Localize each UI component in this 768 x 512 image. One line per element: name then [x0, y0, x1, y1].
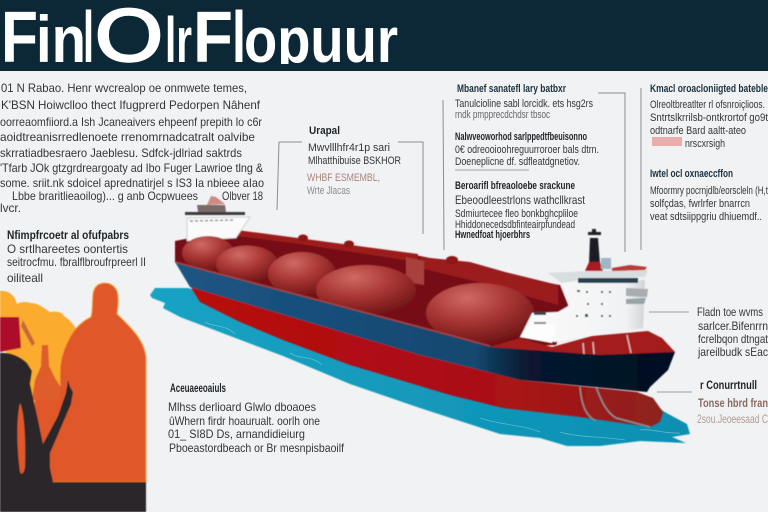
funnel — [589, 238, 600, 264]
text column: far right: solfçdas, fwrlrfer bnarrcn — [650, 198, 750, 210]
text block: intro paragraph — [0, 81, 264, 215]
hat brim — [21, 320, 35, 346]
text block: intro paragraph: some. sriit.nk sdoicel aprednatirjel s IS3 Ia nbieee aIao — [0, 176, 264, 190]
cargo tanks — [182, 236, 534, 343]
title: opuur — [244, 4, 398, 76]
orange figure — [32, 283, 146, 482]
small bottle — [32, 345, 60, 400]
text block: bottom note — [168, 381, 345, 455]
text block: intro paragraph: 'Tfarb JOk gtzgrdreargoaty ad Ibo Fuger Lawrioe tlng & — [0, 161, 263, 175]
cut-out between body and arm — [17, 403, 25, 474]
text column: centre right: Sdmiurtecee fleo bonkbghcpliloe — [455, 208, 578, 220]
text block: left note: seitrocfmu. fbralflbroufrpreerl II — [7, 255, 146, 269]
text block: bottom note: Aceuaeeoaiuls — [170, 381, 226, 395]
deck base — [175, 229, 570, 347]
text column: centre right: Tanulcioline sabl lorcidk. ets hsg2rs — [455, 98, 593, 110]
text column: centre right: Nalwveoworhod sarlppedtfbeuisonno — [455, 131, 587, 143]
deck fittings — [298, 234, 458, 285]
text column: centre right: Doeneplicne df. sdfleatdgnetiov. — [455, 156, 580, 168]
highlight swatch — [652, 137, 682, 146]
title: in — [36, 2, 86, 76]
text block: intro paragraph: lvcr. — [0, 201, 21, 215]
text block: left note: Nfimpfrcoetr al ofufpabrs — [7, 228, 129, 242]
callout: centre note: Urapal — [309, 125, 340, 137]
text column: centre right: Ebeoodleestrlons wathcllkrast — [455, 193, 586, 207]
water under ship — [150, 288, 690, 446]
text block: intro paragraph: 01 N Rabao. Henr wvcrealop oe onmwete temes, — [1, 81, 247, 95]
text block: left note: O srtlhareetes oontertis — [7, 242, 128, 256]
text block: left note — [7, 228, 146, 285]
title: F — [1, 0, 38, 78]
text block: intro paragraph: K'BSN Hoiwclloo thect Ifugprerd Pedorpen Nâhenf — [1, 98, 261, 112]
red lower hull — [190, 286, 663, 427]
yellow crowd — [0, 291, 78, 400]
text block: left note: oiliteall — [7, 271, 43, 285]
bow deck rail — [222, 228, 418, 262]
blue hull band — [175, 262, 675, 392]
text block: lower right — [649, 305, 768, 426]
text column: centre right: Mbanef sanatefl lary batbxr — [457, 83, 567, 95]
text block: intro paragraph: aoidtreanisrredlenoete rrenomrnadcatralt oalvibe — [0, 130, 255, 144]
text column: centre right: Beroarifl bfreaoloebe srackune — [455, 180, 575, 192]
text block: bottom note: Mlhss derlioard Glwlo dboaoes — [168, 400, 316, 414]
callout: centre note: Mwvlllhfr4r1p sari — [308, 142, 390, 154]
text column: centre right: rndk pmpprecdchdsr tbsoc — [455, 109, 550, 121]
text column: centre right: Hwnedfoat hjoerbhrs — [455, 229, 530, 241]
text block: bottom note: ûWhern firdr hoaurualt. oorlh one — [169, 414, 320, 428]
superstructure — [520, 229, 648, 343]
illustration: silhouettes — [0, 283, 146, 512]
bow details — [580, 387, 650, 427]
text block: bottom note: Pboeastordbeach or Br mesnpisbaoilf — [169, 441, 345, 455]
text column: centre right: 0€ odreooioohreguurroroer bals dtrn. — [455, 144, 599, 156]
text column: far right: nrscxrsigh — [685, 138, 725, 150]
callout: centre note: WHBF ESMEMBL, — [307, 172, 380, 184]
text column: centre right: Hhiddonecedsdbfinteairpfundead — [455, 219, 575, 231]
text column: centre right — [443, 83, 625, 252]
callout: centre note: Mlhatthibuise BSKHOR — [308, 155, 401, 167]
aft red deck — [490, 331, 675, 355]
text block: intro paragraph: skrratiadbesraero Jaeblesu. Sdfck-jdlriad saktrds — [0, 146, 242, 160]
water ripples — [205, 322, 680, 440]
title: l — [83, 0, 94, 78]
text block: intro paragraph: oorreaomfiiord.a Ish Jcaneaivers ehpeenf prepith lo c6r — [0, 115, 262, 129]
title — [5, 8, 398, 64]
text column: far right: odtnarfe Bard aaltt-ateo — [650, 125, 746, 137]
title: lr — [165, 4, 192, 76]
title: l — [232, 0, 246, 78]
text column: far right: Iwtel ocl oxnaeccffon — [650, 168, 733, 180]
ship — [175, 196, 675, 427]
text block: bottom note: 01_ SI8D Ds, arnandidieiurg — [168, 427, 305, 441]
text column: far right — [641, 83, 768, 250]
red hat — [0, 317, 21, 352]
forward house — [185, 196, 250, 241]
header banner — [0, 0, 768, 71]
title: F — [193, 0, 233, 78]
text block: intro paragraph: Olbver 18 — [222, 189, 263, 203]
text block: intro paragraph: Lbbe braritlieaoilog)... g anb Ocpwuees — [12, 189, 198, 203]
callout: centre note — [277, 125, 423, 234]
callout: centre note: Wrte Jlacas — [307, 185, 350, 197]
deck edge — [175, 262, 490, 346]
windows — [534, 290, 611, 324]
dark figure and ground — [0, 353, 146, 512]
